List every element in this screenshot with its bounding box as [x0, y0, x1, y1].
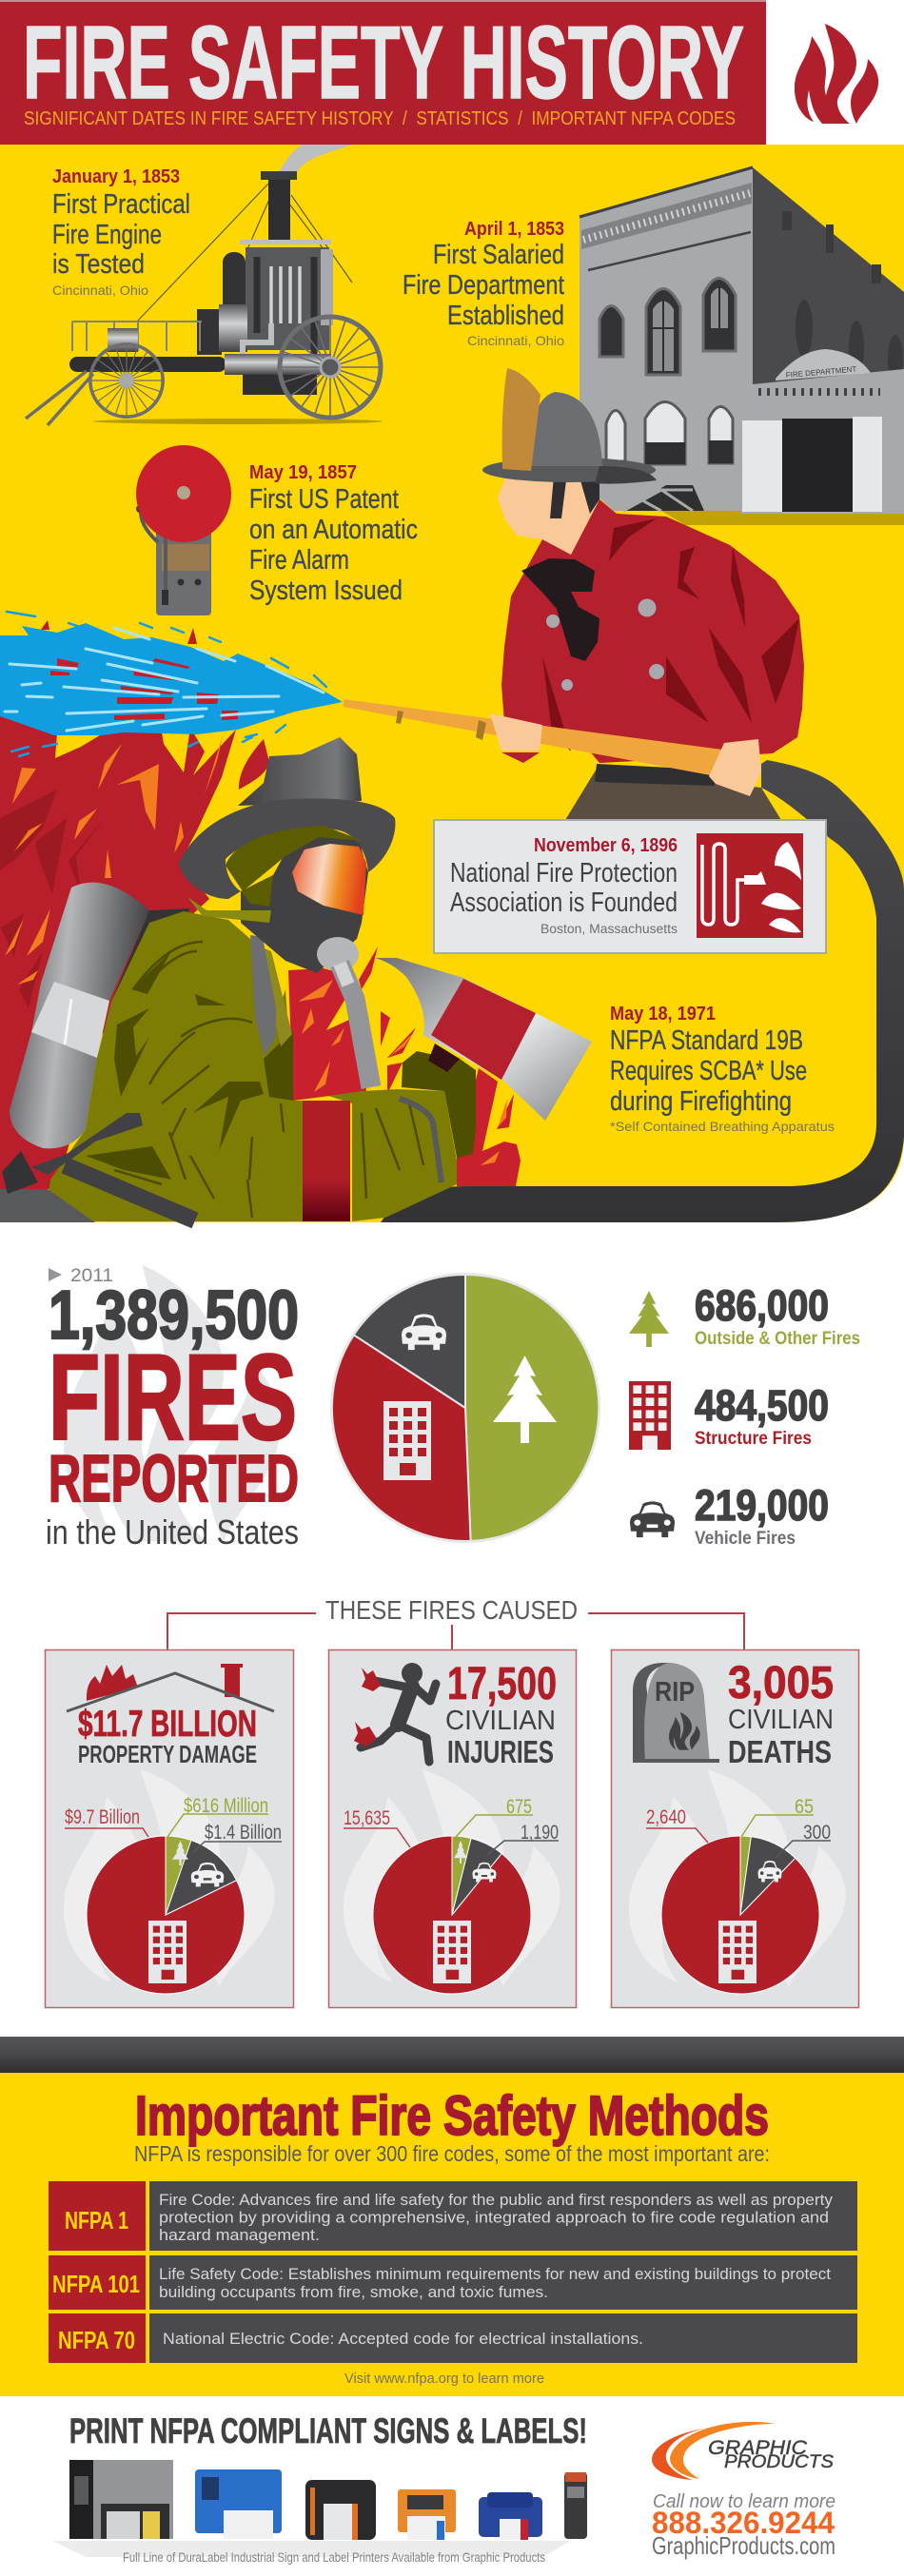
text: first salaried fire department: Cincinnati, Ohio: [467, 333, 564, 348]
illustration: fire department building: [580, 167, 904, 525]
table row: NFPA 70: National Electric Code: Accepted code for electrical installations.: [163, 2330, 643, 2348]
legend: vehicle fires: [630, 1481, 829, 1549]
legend: vehicle fires: Vehicle Fires: [695, 1529, 796, 1549]
panel: property damage: [46, 1649, 293, 2007]
heading: these fires caused with connector lines: [167, 1595, 744, 1649]
chart labels: property damage: $1.4 Billion: [205, 1822, 282, 1844]
glove: [402, 1051, 476, 1158]
text: NFPA standard 19B: May 18, 1971: [610, 1004, 716, 1025]
legend: structure fires: [629, 1381, 829, 1450]
text: first practical fire engine: January 1, 1853: [52, 166, 180, 187]
illustration: firefighter with axe: [0, 737, 592, 1222]
icon: tombstone: RIP: [655, 1677, 695, 1708]
text: automatic fire alarm patent: [249, 462, 418, 606]
statistic: fires reported heading: [46, 1265, 299, 1551]
printer 6: [564, 2472, 587, 2539]
icon: burning house: [67, 1664, 274, 1711]
table row: NFPA 1: NFPA 1: [65, 2206, 128, 2234]
table row: NFPA 1: [49, 2181, 857, 2251]
axe: [375, 958, 592, 1121]
callout: NFPA founded: [434, 820, 826, 953]
callout: NFPA founded: November 6, 1896: [534, 835, 678, 856]
text: first practical fire engine: Cincinnati, Ohio: [52, 283, 148, 298]
dark back plate: [111, 908, 190, 1002]
chart labels: civilian injuries: 15,635: [344, 1807, 390, 1829]
legend: outside fires: 686,000: [695, 1281, 829, 1330]
text: first salaried fire department: Fire Department: [403, 270, 564, 301]
text: first practical fire engine: is Tested: [52, 249, 145, 280]
text: NFPA standard 19B: [610, 1004, 835, 1134]
contact details: Call now to learn more: [653, 2491, 835, 2512]
mask: [187, 835, 371, 1087]
logo: graphic products: PRODUCTS: [724, 2452, 834, 2472]
panel: important fire safety methods: Visit www.nfpa.org to learn more: [344, 2371, 544, 2387]
pie chart: fires by type: [330, 1273, 600, 1543]
chart labels: civilian deaths: 65: [795, 1796, 814, 1818]
coat folds: [86, 951, 293, 1180]
panel: civilian deaths: [611, 1649, 858, 2007]
heading: print signs and labels: PRINT NFPA COMPLIANT SIGNS & LABELS!: [69, 2411, 587, 2450]
pie chart: property damage: [87, 1836, 245, 1994]
header band: [0, 0, 766, 145]
table row: NFPA 70: NFPA 70: [58, 2326, 135, 2354]
printer 2: [195, 2469, 282, 2539]
icon: tombstone: [633, 1663, 719, 1763]
icon: hose and flames sign: [697, 833, 803, 938]
contact details: 888.326.9244: [652, 2506, 835, 2540]
text: NFPA standard 19B: Requires SCBA* Use: [610, 1056, 807, 1086]
panel: important fire safety methods: NFPA is responsible for over 300 fire codes, some of the most important are:: [134, 2141, 770, 2166]
panel: civilian injuries: 17,500: [447, 1659, 557, 1709]
table row: NFPA 1: hazard management.: [159, 2226, 320, 2244]
text: NFPA standard 19B: during Firefighting: [610, 1086, 792, 1117]
product photo: printers: [52, 2460, 587, 2557]
chart labels: property damage: [65, 1795, 282, 1852]
text: first salaried fire department: First Salaried: [433, 240, 564, 270]
text: automatic fire alarm patent: May 19, 1857: [249, 462, 357, 483]
panel: civilian injuries: [329, 1649, 577, 2007]
subtitle: SIGNIFICANT DATES IN FIRE SAFETY HISTORY / STATISTICS / IMPORTANT NFPA CODES: [24, 108, 736, 129]
statistic: fires reported heading: 1,389,500: [49, 1278, 299, 1354]
table row: NFPA 1: protection by providing a comprehensive, integrated approach to fire code regulation and: [159, 2209, 829, 2226]
pie chart: civilian injuries: [373, 1836, 531, 1994]
illustration: fire department building: FIRE DEPARTMENT: [785, 364, 857, 380]
panel: important fire safety methods: [0, 2073, 904, 2396]
callout: NFPA founded: Association is Founded: [450, 888, 678, 918]
statistic: fires reported heading: in the United States: [46, 1512, 299, 1551]
pie chart: civilian deaths: [661, 1836, 819, 1994]
table row: NFPA 70: [49, 2313, 857, 2363]
heading: these fires caused with connector lines: THESE FIRES CAUSED: [325, 1595, 578, 1625]
text: first practical fire engine: First Practical: [52, 189, 190, 220]
reflective red band: [303, 1101, 350, 1221]
table row: NFPA 101: Life Safety Code: Establishes minimum requirements for new and existing buildings to protect: [159, 2265, 831, 2283]
illustration: flames behind firefighters: [0, 620, 521, 1189]
chart labels: civilian deaths: [646, 1796, 831, 1858]
coat arm: [328, 1089, 457, 1221]
icon: flame logo: [795, 24, 878, 124]
printer 1: [69, 2460, 173, 2539]
illustration: hose: [381, 760, 904, 1222]
callout: NFPA founded: National Fire Protection: [450, 858, 678, 888]
logo: graphic products: [652, 2422, 834, 2480]
table row: NFPA 101: [49, 2255, 857, 2310]
text: automatic fire alarm patent: System Issued: [249, 576, 403, 606]
chart labels: civilian injuries: 675: [506, 1796, 532, 1818]
dark divider band: [0, 2037, 904, 2073]
table row: NFPA 101: NFPA 101: [52, 2270, 140, 2298]
printer 5: [479, 2492, 542, 2540]
icon: running figure on fire: [354, 1663, 436, 1762]
panel: civilian deaths: CIVILIAN: [728, 1705, 834, 1735]
text: first salaried fire department: April 1, 1853: [464, 219, 564, 240]
hose nozzle: [344, 699, 730, 776]
logo: graphic products: GRAPHIC: [708, 2437, 808, 2459]
chart labels: civilian injuries: [344, 1796, 559, 1855]
illustration: alarm bell: [136, 445, 231, 615]
caption: printer line: Full Line of DuraLabel Industrial Sign and Label Printers Available from Graphic Products: [123, 2549, 545, 2565]
chart labels: civilian injuries: 1,190: [521, 1822, 559, 1844]
contact details: [652, 2491, 835, 2560]
printer 3: [305, 2480, 376, 2540]
chart labels: property damage: $616 Million: [184, 1795, 268, 1817]
text: first salaried fire department: Established: [447, 301, 564, 331]
chart labels: civilian deaths: 300: [803, 1822, 831, 1844]
text: NFPA standard 19B: *Self Contained Breathing Apparatus: [610, 1119, 835, 1134]
chart labels: property damage: $9.7 Billion: [65, 1806, 140, 1828]
legend: structure fires: 484,500: [695, 1381, 829, 1430]
panel: property damage: $11.7 BILLION: [78, 1704, 257, 1745]
contact details: GraphicProducts.com: [652, 2531, 835, 2560]
statistic: fires reported heading: REPORTED: [49, 1441, 299, 1515]
legend: outside fires: [629, 1281, 860, 1349]
text: first practical fire engine: [52, 166, 190, 298]
illustration: firefighter with hose: [344, 368, 804, 820]
text: automatic fire alarm patent: Fire Alarm: [249, 545, 349, 576]
harness straps: [0, 935, 292, 1222]
text: NFPA standard 19B: NFPA Standard 19B: [610, 1025, 803, 1056]
printer 4: [398, 2489, 456, 2540]
text: automatic fire alarm patent: on an Automatic: [249, 515, 418, 545]
statistic: fires reported heading: 2011: [70, 1266, 113, 1286]
panel: property damage: PROPERTY DAMAGE: [78, 1740, 257, 1768]
air tank: [10, 883, 149, 1148]
helmet: [179, 737, 395, 899]
panel: civilian deaths: 3,005: [728, 1658, 834, 1708]
turnout coat torso: [45, 911, 305, 1221]
table row: NFPA 1: Fire Code: Advances fire and life safety for the public and first responders as well as property: [159, 2191, 833, 2209]
legend: structure fires: Structure Fires: [695, 1429, 812, 1449]
yellow history background: [0, 145, 904, 1222]
illustration: steam fire engine: [26, 145, 383, 425]
text: automatic fire alarm patent: First US Patent: [249, 484, 399, 515]
table row: NFPA 101: building occupants from fire, smoke, and toxic fumes.: [159, 2283, 548, 2301]
panel: civilian injuries: CIVILIAN: [445, 1706, 556, 1736]
callout: NFPA founded: Boston, Massachusetts: [540, 921, 678, 936]
text: first practical fire engine: Fire Engine: [52, 220, 162, 250]
legend: vehicle fires: 219,000: [695, 1481, 829, 1530]
legend: outside fires: Outside & Other Fires: [695, 1329, 860, 1349]
panel: civilian injuries: INJURIES: [447, 1734, 554, 1769]
chart labels: civilian deaths: 2,640: [646, 1806, 686, 1828]
helmet: [482, 368, 657, 484]
panel: civilian deaths: DEATHS: [728, 1734, 832, 1769]
statistic: fires reported heading: FIRES: [49, 1330, 297, 1466]
text: first salaried fire department: [403, 219, 564, 348]
illustration: water spray: [0, 612, 343, 756]
